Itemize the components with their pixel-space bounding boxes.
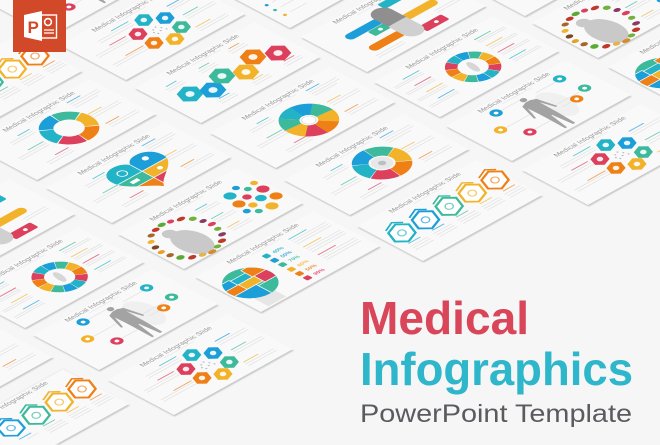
panel: slide twelve segment ring left [0, 227, 146, 330]
legend dots [263, 0, 308, 17]
text columns [391, 25, 541, 108]
panel: slide food and dots [117, 168, 305, 271]
chart: human body [12, 0, 155, 24]
chart: human body [60, 280, 203, 358]
chart: outlined hexagons [0, 38, 75, 130]
slide title: Medical Infographic Slide [315, 126, 391, 168]
percentages: 50% [279, 250, 294, 259]
percentages: 50% [304, 264, 319, 272]
panel: slide body chart center [445, 60, 633, 163]
text columns [231, 76, 381, 158]
chart: capsule bars [330, 0, 472, 58]
slide title: Medical Infographic Slide [226, 223, 302, 265]
chart: hexagon chain [155, 30, 309, 115]
slide title: Medical Infographic Slide [64, 281, 140, 323]
panel: slide hexagon row center [356, 156, 551, 263]
chart: wheel [338, 139, 426, 187]
slide title: Medical Infographic Slide [553, 116, 629, 158]
panel: slide donut [0, 79, 158, 182]
panel: slide text lower left [0, 322, 55, 425]
text columns [0, 88, 142, 170]
chart: food ring [545, 0, 660, 58]
chart: ring [16, 253, 103, 300]
panel: slide hexagon chain [134, 22, 322, 125]
chart: hexagon cluster [125, 321, 287, 409]
chart: capsule bars [0, 188, 61, 266]
chart: heart [86, 142, 200, 203]
panel: slide text top right [458, 0, 646, 18]
text columns [305, 123, 455, 205]
panel: slide body chart left [32, 269, 220, 372]
panel: slide hexagon row top left [0, 32, 91, 139]
icon: PowerPoint logo [13, 0, 66, 52]
panel: slide hexagon cluster top [59, 0, 247, 82]
panel: slide head [194, 211, 382, 314]
title: Medical: Medical [360, 292, 529, 344]
chart: food ring [131, 196, 264, 269]
panel: slide pills top [300, 0, 488, 74]
text columns [480, 0, 630, 6]
panel: slide hexagon cluster bottom [107, 314, 295, 417]
subtitle: PowerPoint Template [360, 400, 632, 428]
icon: PowerPoint logo: P [28, 18, 39, 37]
chart: head tiles [620, 10, 660, 101]
percentages [271, 246, 327, 276]
panel: slide head right [607, 1, 660, 104]
panel: slide hexagon cluster right [521, 104, 660, 207]
chart: hexagon cluster [539, 111, 660, 199]
percentages: 90% [312, 268, 327, 276]
chart: outlined hexagons [367, 162, 535, 254]
text columns [67, 131, 217, 213]
chart: donut [23, 103, 115, 153]
slide title: Medical Infographic Slide [405, 28, 481, 70]
panel: slide six segment wheel [283, 114, 471, 217]
panel: slide food top right [531, 0, 660, 60]
slide title: Medical Infographic Slide [166, 34, 242, 76]
panel: slide body chart top left [0, 0, 172, 38]
slide title: Medical Infographic Slide [477, 72, 553, 114]
panel: slide list top [223, 0, 411, 30]
chart: bubble cluster [628, 0, 660, 8]
slide title: Medical Infographic Slide [388, 172, 464, 214]
panel: slide hexagon row bottom left [0, 365, 138, 445]
slide title: Medical Infographic Slide [77, 134, 153, 176]
percentages: 60% [296, 259, 311, 268]
chart: head tiles [207, 220, 374, 311]
percentages: 40% [271, 246, 286, 254]
slide title: Medical Infographic Slide [149, 180, 225, 222]
panel: slide twelve segment ring top [373, 16, 561, 119]
chart: outlined hexagons [0, 371, 122, 445]
chart: ring [430, 43, 516, 90]
slide title: Medical Infographic Slide [241, 79, 317, 121]
slide title: Medical Infographic Slide [139, 326, 215, 368]
chart: bubble cluster [214, 177, 292, 219]
panel: slide eight segment wheel [209, 67, 397, 170]
slide title: Medical Infographic Slide [2, 91, 78, 133]
panel: slide pills left [0, 179, 77, 282]
chart: hexagon cluster [77, 0, 239, 74]
title: Infographics: Infographics [360, 343, 633, 395]
percentages: 70% [287, 255, 302, 263]
text columns [0, 331, 39, 413]
panel: slide heart [45, 122, 233, 225]
chart: human body [473, 71, 616, 149]
chart: wheel [270, 99, 348, 141]
text columns [0, 236, 126, 319]
